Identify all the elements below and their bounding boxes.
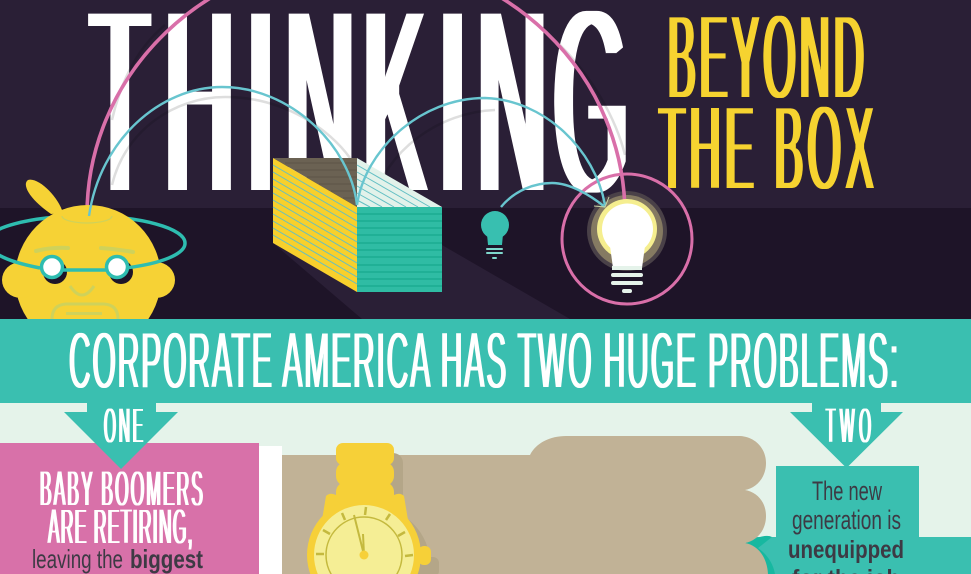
arrow: two xyxy=(790,397,903,468)
arc: pink thought to bulb xyxy=(87,0,625,222)
panel: dark hero background xyxy=(0,0,971,319)
subtitle: BEYOND THE BOX xyxy=(659,0,874,217)
illustration: wristwatch xyxy=(307,443,439,574)
illustration: small teal light bulb xyxy=(481,211,509,259)
text: leaving the biggest: leaving the xyxy=(32,544,123,574)
illustration: bulb glow halo xyxy=(587,191,667,271)
illustration: yellow bald head with glasses xyxy=(0,180,185,351)
illustration: forearm and fist xyxy=(282,436,768,574)
text: baby boomers heading: ARE RETIRING, xyxy=(48,500,192,556)
text: the new generation is unequipped: generation is xyxy=(792,505,901,535)
banner: corporate america headline: CORPORATE AMERICA HAS TWO HUGE PROBLEMS: xyxy=(69,315,898,405)
text: the new generation is unequipped: The new xyxy=(812,476,882,506)
panel: white strip xyxy=(259,446,282,574)
arc: teal thought through box xyxy=(89,87,609,216)
arrow: one: ONE xyxy=(104,397,143,454)
illustration: open box xyxy=(273,158,442,292)
panel: problem one pink card xyxy=(0,443,259,574)
text: leaving the biggest: biggest xyxy=(130,544,203,574)
text: baby boomers heading: BABY BOOMERS xyxy=(40,462,203,518)
arrow: one xyxy=(64,397,178,469)
text: the new generation is unequipped: unequipped xyxy=(788,536,904,564)
arc shadows on title xyxy=(112,25,625,205)
illustration: glowing light bulb in pink circle xyxy=(562,174,692,304)
panel: teal problem two backing xyxy=(745,466,971,574)
arrow: two: TWO xyxy=(826,397,871,454)
subtitle: BEYOND THE BOX: THE BOX xyxy=(659,81,874,217)
text: baby boomers heading xyxy=(40,462,203,556)
text: the new generation is unequipped xyxy=(788,476,904,574)
panel: light background xyxy=(0,403,971,574)
